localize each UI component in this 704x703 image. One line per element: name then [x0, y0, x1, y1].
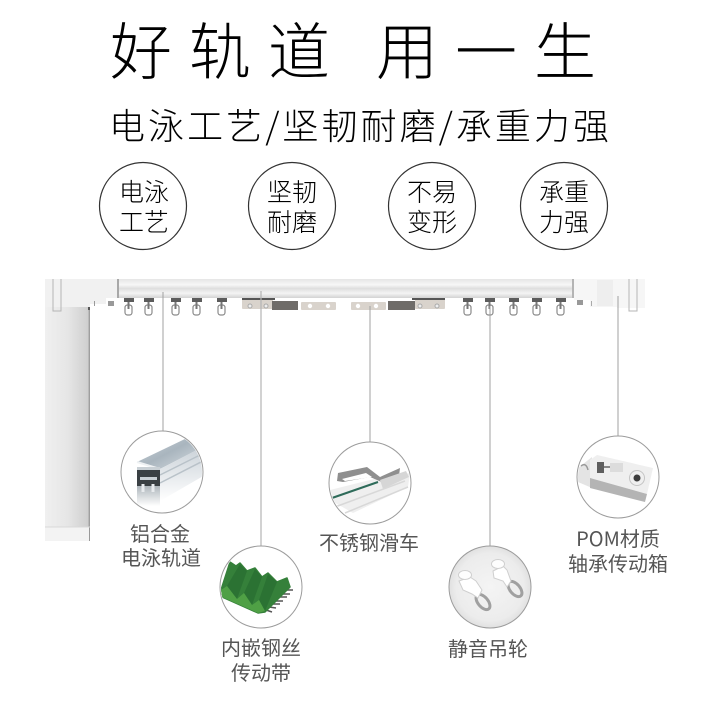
badge: 坚韧耐磨: 坚韧	[267, 173, 317, 209]
title: 生	[534, 2, 596, 92]
title: 用	[376, 2, 438, 92]
label: 电泳轨道	[121, 542, 201, 571]
callout: 铝合金电泳轨道	[121, 431, 205, 571]
master carriers	[242, 298, 445, 310]
label	[121, 518, 201, 571]
callout: POM材质轴承传动箱	[568, 436, 668, 577]
label: 传动带	[231, 657, 291, 686]
badge: 电泳工艺: 电泳	[119, 173, 169, 209]
callout: 内嵌钢丝传动带	[220, 546, 302, 686]
title: 一	[455, 2, 517, 92]
label: 不锈钢滑车	[319, 527, 419, 556]
label: 静音吊轮	[448, 633, 528, 662]
label: POM材质	[576, 523, 660, 552]
label: 铝合金	[130, 518, 190, 547]
title: 好	[110, 2, 172, 92]
badge: 电泳工艺	[100, 162, 186, 250]
badge: 不易变形: 不易	[407, 173, 457, 209]
callout: 静音吊轮	[448, 546, 531, 662]
title	[110, 2, 596, 92]
title: 道	[268, 2, 330, 92]
label: 轴承传动箱	[568, 548, 668, 577]
right gear box	[574, 279, 645, 311]
label	[221, 632, 301, 686]
callout: 不锈钢滑车	[319, 442, 419, 556]
badge: 承重力强: 承重	[539, 173, 589, 209]
badge: 坚韧耐磨	[248, 162, 336, 250]
icon: stainless carriage	[329, 442, 411, 524]
icon: silent pulleys	[449, 546, 531, 628]
icon: gear box	[577, 436, 659, 518]
label	[568, 523, 668, 577]
badge: 电泳工艺: 工艺	[119, 203, 169, 239]
badge: 承重力强: 力强	[539, 203, 589, 239]
curtain track assembly	[45, 279, 645, 541]
badge: 坚韧耐磨: 耐磨	[267, 203, 317, 239]
left motor housing	[45, 279, 117, 541]
icon: aluminium profile	[121, 431, 205, 513]
badge: 承重力强	[520, 162, 608, 250]
leader lines	[163, 291, 618, 546]
badge: 不易变形	[388, 162, 476, 250]
label: 内嵌钢丝	[221, 632, 301, 661]
badge: 不易变形: 变形	[407, 203, 457, 239]
title: 轨	[189, 2, 251, 92]
feature badges	[100, 162, 608, 250]
aluminium rail	[117, 279, 574, 298]
subtitle: 电泳工艺/坚韧耐磨/承重力强	[109, 98, 609, 150]
icon: green timing belt	[220, 546, 302, 628]
gliders	[124, 298, 566, 315]
